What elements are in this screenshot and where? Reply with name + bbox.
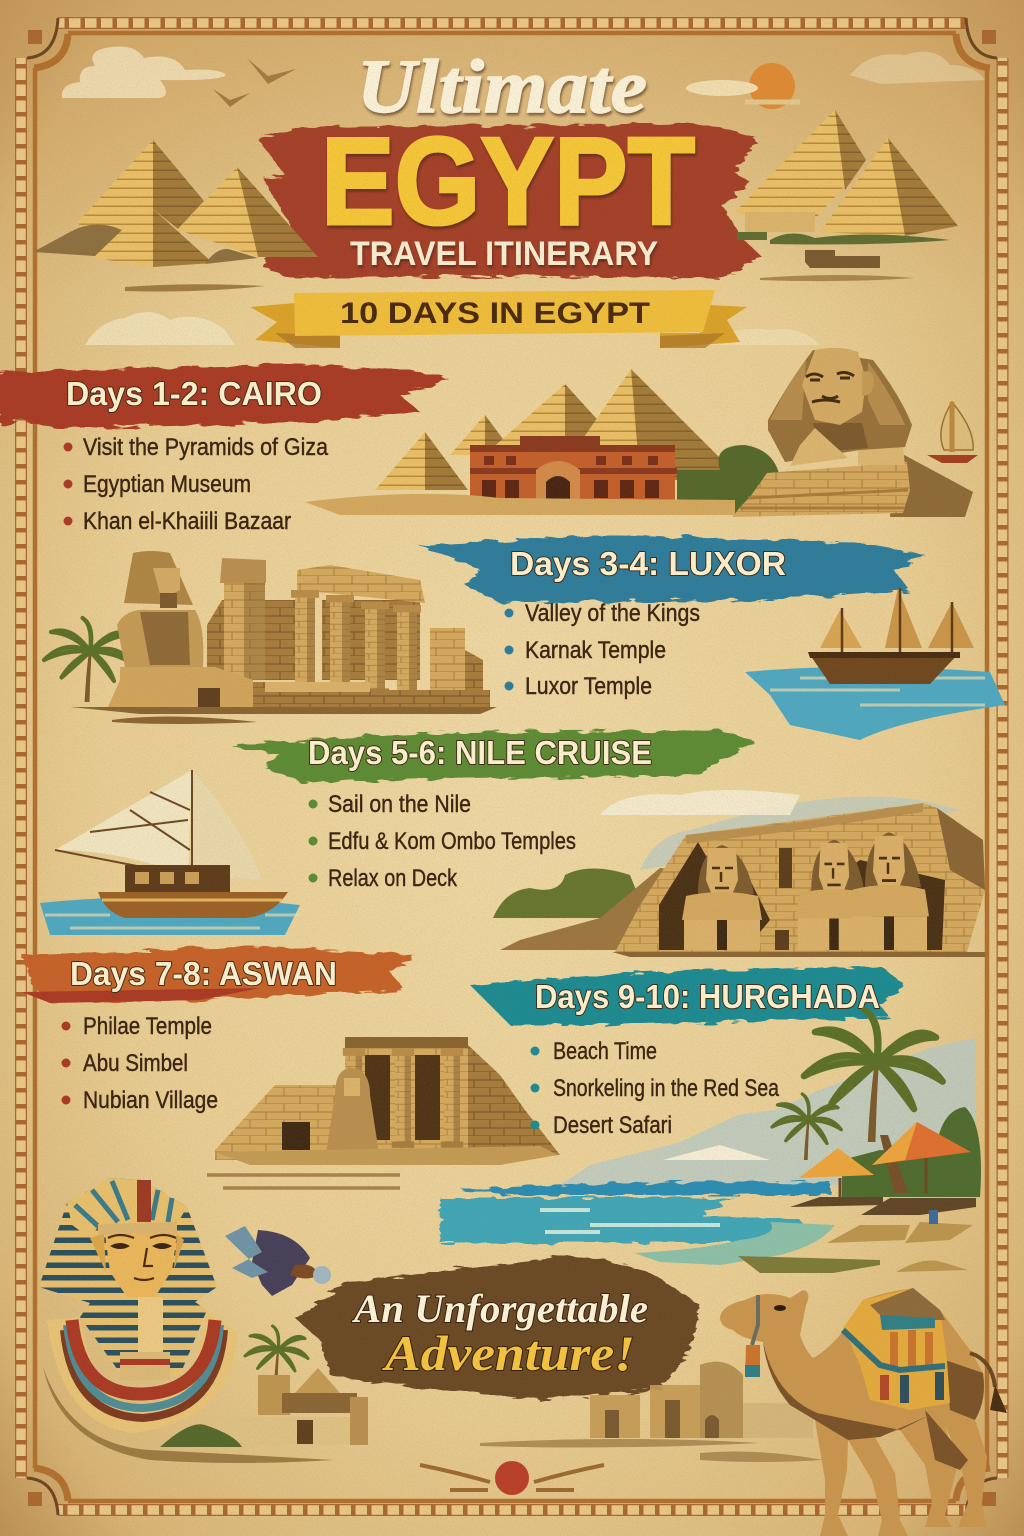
neck	[813, 423, 868, 452]
bottom ornament	[420, 1461, 604, 1495]
headdress	[768, 350, 912, 462]
face	[802, 348, 866, 425]
right pyramids	[735, 110, 958, 281]
title: Ultimate: Ultimate	[357, 45, 647, 129]
outer crescent	[43, 1367, 333, 1463]
flying bird creature	[225, 1226, 331, 1296]
birds	[213, 58, 296, 107]
Cairo list: Egyptian Museum	[83, 471, 251, 498]
closing brush: An Unforgettable	[351, 1286, 648, 1331]
sun	[686, 63, 800, 109]
Cairo list	[64, 434, 329, 535]
face	[98, 1222, 177, 1236]
Luxor banner	[418, 535, 925, 603]
Luxor list: Valley of the Kings	[525, 600, 700, 627]
collar	[47, 1310, 237, 1433]
beach scene	[440, 1010, 981, 1273]
closing brush: Adventure!	[382, 1325, 635, 1381]
ground	[70, 707, 497, 724]
Aswan list: Abu Simbel	[83, 1050, 188, 1077]
Nile Cruise banner	[230, 730, 755, 782]
sky and clouds	[640, 797, 960, 870]
Hurghada list: Desert Safari	[553, 1112, 672, 1139]
Cairo banner	[0, 364, 450, 428]
trees	[493, 868, 640, 918]
Cairo banner: Days 1-2: CAIRO	[66, 375, 322, 412]
Nile list: Sail on the Nile	[328, 791, 471, 818]
small palm	[772, 1094, 841, 1160]
title: EGYPT: EGYPT	[321, 113, 695, 251]
Luxor list	[504, 600, 700, 700]
ribbon: 10 DAYS IN EGYPT	[340, 297, 650, 330]
red brush	[257, 124, 760, 278]
camel blanket	[843, 1288, 950, 1410]
stepped base	[732, 462, 910, 517]
nemes headdress	[39, 1178, 217, 1375]
Aswan list: Philae Temple	[83, 1013, 212, 1040]
Cairo list: Khan el-Khaiili Bazaar	[83, 508, 291, 535]
beach shadows	[790, 1197, 976, 1215]
camel halter and tassel	[752, 1295, 758, 1345]
Cairo scene: pyramids and museum	[305, 369, 780, 515]
right village	[480, 1362, 823, 1462]
Luxor temple scene	[44, 551, 497, 724]
seated statue	[124, 551, 193, 605]
steps	[253, 682, 490, 707]
camel shading	[763, 1342, 984, 1470]
pharaoh mask	[39, 1178, 333, 1463]
palm	[44, 618, 132, 702]
Cairo list: Visit the Pyramids of Giza	[83, 434, 329, 461]
left pyramids	[33, 140, 318, 291]
title banner	[257, 45, 760, 278]
Hurghada banner: Days 9-10: HURGHADA	[535, 978, 880, 1015]
subtitle: TRAVEL ITINERARY	[350, 235, 658, 273]
Aswan list: Nubian Village	[83, 1087, 218, 1114]
camel body	[720, 1288, 987, 1536]
Hurghada list: Beach Time	[553, 1038, 657, 1065]
palm trunk	[880, 1135, 908, 1193]
camel tail	[970, 1353, 995, 1387]
Hurghada list	[530, 1038, 780, 1139]
Hurghada banner	[470, 966, 905, 1025]
Luxor list: Luxor Temple	[525, 673, 652, 700]
facade	[615, 803, 985, 952]
Luxor list: Karnak Temple	[525, 637, 666, 664]
clouds	[62, 46, 985, 345]
closing brush	[295, 1255, 700, 1400]
shrubs	[842, 1107, 981, 1197]
rubble slope	[500, 868, 680, 950]
Aswan list	[62, 1013, 218, 1114]
Hurghada list: Snorkeling in the Red Sea	[553, 1075, 780, 1102]
columns	[220, 558, 266, 583]
Nile Cruise banner: Days 5-6: NILE CRUISE	[308, 734, 652, 771]
large palm	[804, 1010, 943, 1142]
Abu Simbel temple	[493, 790, 985, 957]
colossi	[682, 845, 762, 950]
Nile list	[308, 791, 576, 892]
camel	[720, 1288, 1007, 1536]
Luxor banner: Days 3-4: LUXOR	[510, 545, 786, 582]
Nile sailing boat	[40, 770, 300, 935]
small sailboat	[927, 402, 978, 463]
Aswan temple scene	[215, 1037, 560, 1165]
sea	[462, 1182, 831, 1195]
dark recesses	[659, 842, 770, 950]
Nile list: Edfu & Kom Ombo Temples	[328, 828, 576, 855]
umbrellas	[799, 1148, 874, 1178]
Nile list: Relax on Deck	[328, 865, 458, 892]
Luxor sailboat and water	[745, 588, 1005, 740]
mountains and sky	[560, 1038, 976, 1185]
left village	[160, 1175, 400, 1447]
dark rear body	[890, 450, 973, 517]
Aswan banner	[22, 946, 415, 1003]
ruin walls	[207, 600, 483, 697]
ribbon	[250, 290, 747, 348]
Aswan banner: Days 7-8: ASWAN	[70, 955, 337, 992]
sphinx	[732, 348, 973, 517]
